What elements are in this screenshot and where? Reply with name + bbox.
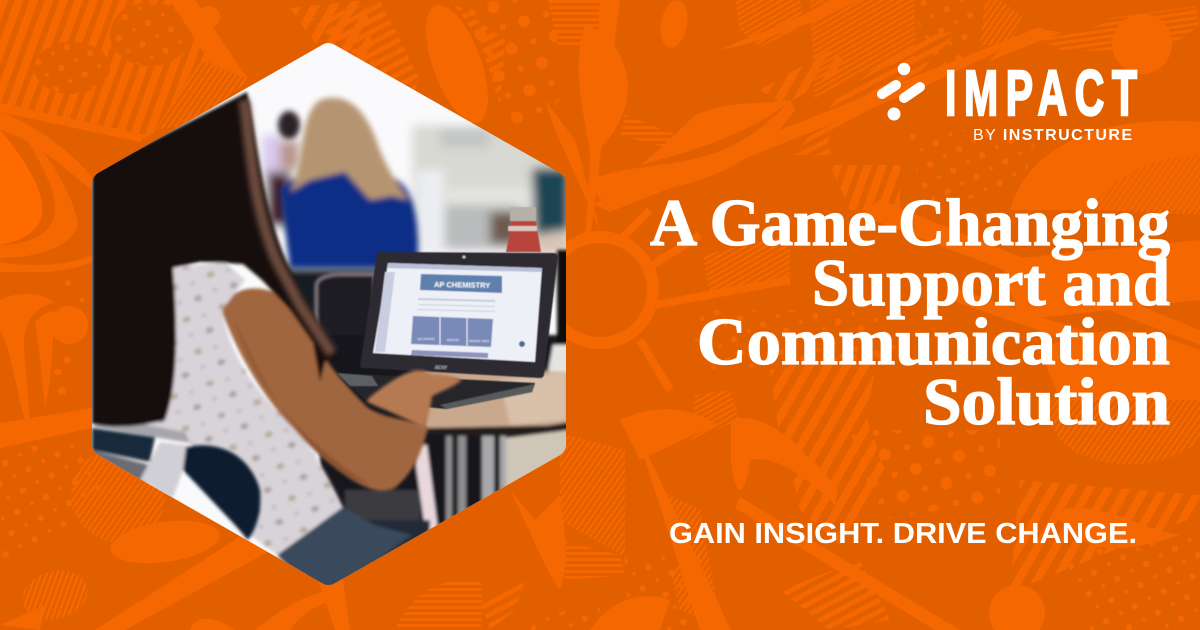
heading: Solution xyxy=(923,365,1170,439)
top-centre stripes, leaf, dots xyxy=(310,0,420,100)
left swirl xyxy=(0,130,42,245)
heading xyxy=(650,186,1170,439)
shirt xyxy=(93,262,343,555)
brown hair highlights xyxy=(244,100,332,354)
black hair xyxy=(92,92,340,427)
logo: IMPACT by Instructure xyxy=(882,58,1137,144)
bottom-left dots and stripes xyxy=(0,440,110,560)
screen tiles xyxy=(411,316,493,347)
screen banner: AP CHEMISTRY xyxy=(434,280,490,290)
chair back and seat xyxy=(92,428,260,540)
hexagon classroom photo xyxy=(85,35,575,595)
top-right pattern xyxy=(657,0,691,50)
bottom-right pattern xyxy=(1037,400,1200,464)
logo mark xyxy=(882,63,920,120)
screen tiles: MODULES xyxy=(447,339,460,342)
tagline: GAIN INSIGHT. DRIVE CHANGE. xyxy=(669,518,1137,550)
girl with long hair xyxy=(92,92,428,588)
top-left striped fan xyxy=(0,0,250,138)
heading: Communication xyxy=(697,305,1170,379)
chair frame and dark foreground xyxy=(300,250,570,590)
laptop xyxy=(337,252,558,409)
middle pattern behind heading xyxy=(547,237,653,343)
blurred classroom background xyxy=(85,35,575,595)
by instructure: BY INSTRUCTURE xyxy=(973,127,1132,144)
heading: A Game-Changing xyxy=(650,186,1170,260)
jeans xyxy=(277,507,412,588)
laptop: acer xyxy=(435,364,448,371)
screen banner xyxy=(420,274,502,293)
screen tiles: GET STARTED xyxy=(417,338,435,341)
hand on keyboard xyxy=(367,370,462,428)
wordmark: IMPACT xyxy=(945,58,1137,129)
bottle xyxy=(506,207,541,252)
screen tiles: PERIODIC TABLE xyxy=(469,340,490,343)
heading: Support and xyxy=(812,246,1170,320)
arm xyxy=(222,288,428,491)
